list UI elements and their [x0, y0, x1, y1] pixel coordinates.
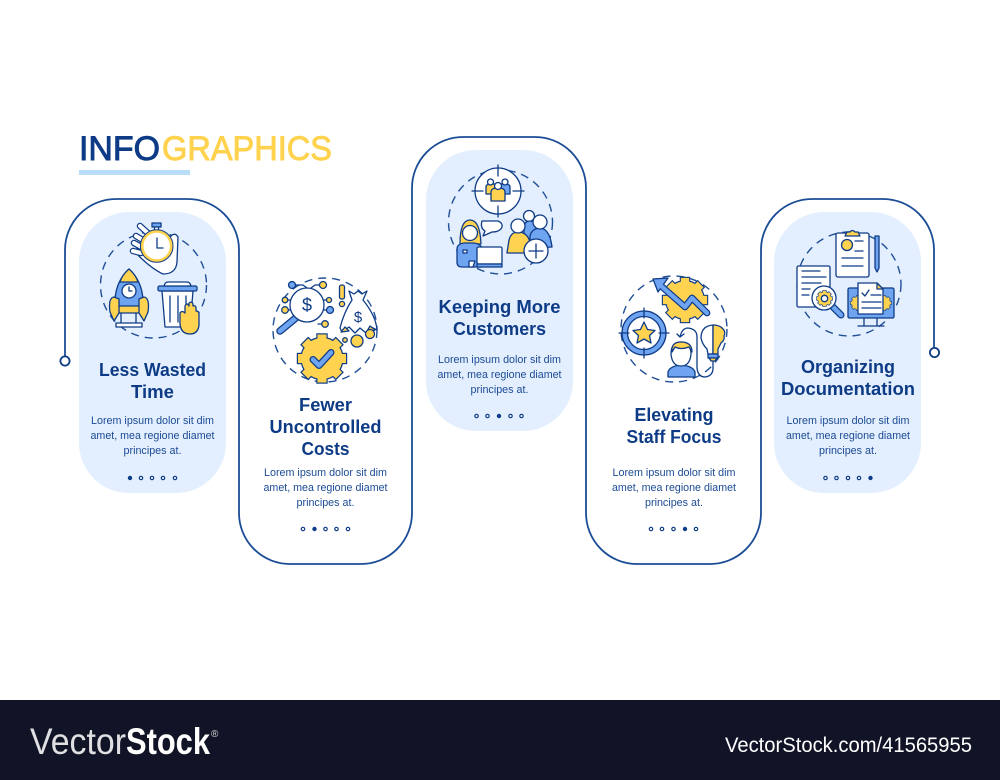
- text block: amet, mea regione diamet: [612, 482, 736, 494]
- text block: Lorem ipsum dolor sit dim: [91, 415, 214, 427]
- heading: [626, 404, 722, 447]
- heading: [438, 296, 560, 339]
- panel: fewer uncontrolled costs: [264, 278, 388, 531]
- icon: cost magnifier, money bag and gear: $: [302, 295, 312, 315]
- text block: [90, 415, 214, 457]
- text block: Lorem ipsum dolor sit dim: [786, 415, 910, 427]
- text block: [786, 415, 910, 457]
- text block: [612, 467, 736, 509]
- panel: elevating staff focus: [612, 276, 736, 531]
- panel: organizing documentation: [781, 230, 915, 480]
- text block: Lorem ipsum dolor sit dim: [612, 467, 736, 479]
- pagination dots: [649, 527, 698, 531]
- heading: [99, 359, 206, 402]
- icon: clipboard, document search and monitor: [797, 230, 901, 336]
- heading: Time: [131, 381, 174, 402]
- heading: Customers: [453, 318, 546, 339]
- footer image id: VectorStock.com/41565955: [725, 734, 972, 757]
- title: INFOGRAPHICS: INFO: [79, 130, 160, 168]
- footer bar: [0, 700, 1000, 780]
- icon: stopwatch, rocket and bin: [100, 223, 206, 338]
- text block: amet, mea regione diamet: [90, 430, 214, 442]
- heading: Staff Focus: [626, 426, 722, 447]
- title: INFOGRAPHICS: [79, 130, 332, 175]
- panel: keeping more customers: [438, 165, 562, 418]
- text block: principes at.: [819, 445, 877, 457]
- heading: Organizing: [801, 356, 895, 377]
- connecting outline path: [60, 137, 939, 564]
- text block: [264, 467, 388, 509]
- title: INFOGRAPHICS: GRAPHICS: [162, 130, 332, 168]
- panel backgrounds: light blue cards: [79, 150, 921, 493]
- icon: cost magnifier, money bag and gear: $: [354, 309, 363, 326]
- heading: [781, 356, 915, 399]
- heading: Less Wasted: [99, 359, 206, 380]
- pagination dots: [128, 476, 177, 480]
- heading: Keeping More: [438, 296, 560, 317]
- footer logo: VectorStock: ®: [211, 729, 219, 740]
- text block: Lorem ipsum dolor sit dim: [264, 467, 387, 479]
- text block: amet, mea regione diamet: [438, 369, 562, 381]
- text block: amet, mea regione diamet: [264, 482, 388, 494]
- footer logo: VectorStock: Stock: [126, 721, 210, 762]
- text block: Lorem ipsum dolor sit dim: [438, 354, 561, 366]
- heading: Fewer: [299, 394, 352, 415]
- text block: principes at.: [645, 497, 703, 509]
- icon: target group and support agent: [448, 165, 552, 274]
- text block: principes at.: [124, 445, 182, 457]
- icon: cost magnifier, money bag and gear: [273, 278, 377, 382]
- pagination dots: [824, 476, 873, 480]
- heading: [270, 394, 382, 459]
- footer logo: VectorStock: Vector: [30, 721, 126, 762]
- heading: Documentation: [781, 378, 915, 399]
- pagination dots: [475, 414, 523, 418]
- icon: gear arrow, star target, staff and bulb: [619, 276, 727, 382]
- heading: Costs: [302, 438, 350, 459]
- panel: less wasted time: [90, 223, 214, 480]
- text block: principes at.: [470, 384, 528, 396]
- footer logo: VectorStock: [30, 721, 219, 762]
- heading: Uncontrolled: [270, 416, 382, 437]
- text block: principes at.: [296, 497, 354, 509]
- text block: [438, 354, 562, 396]
- text block: amet, mea regione diamet: [786, 430, 910, 442]
- pagination dots: [301, 527, 350, 531]
- heading: Elevating: [634, 404, 714, 425]
